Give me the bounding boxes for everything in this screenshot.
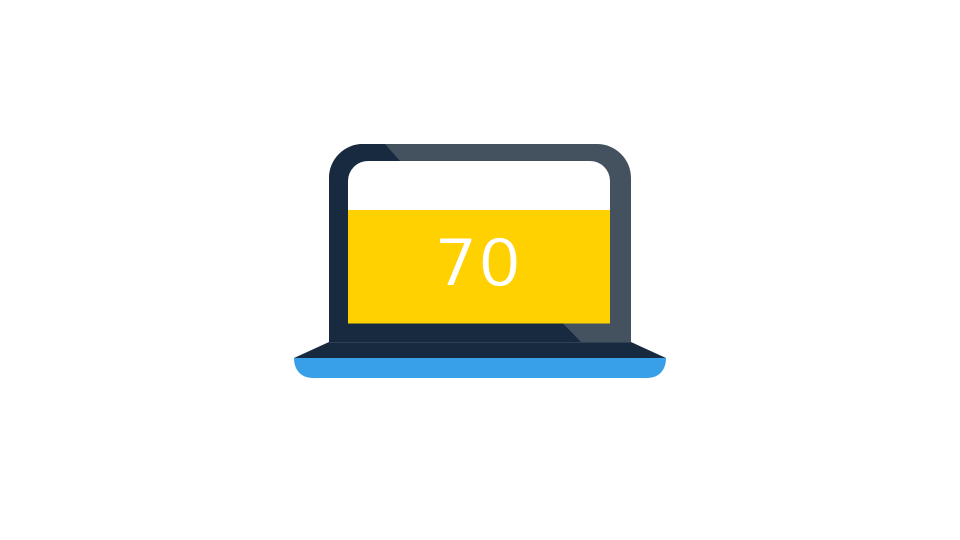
laptop base bbox=[294, 358, 666, 378]
screen background bbox=[348, 161, 610, 324]
progress fill bbox=[348, 210, 610, 324]
laptop lid frame bbox=[329, 144, 631, 342]
laptop keyboard deck bbox=[294, 342, 666, 358]
progress value: 70 bbox=[434, 225, 521, 301]
